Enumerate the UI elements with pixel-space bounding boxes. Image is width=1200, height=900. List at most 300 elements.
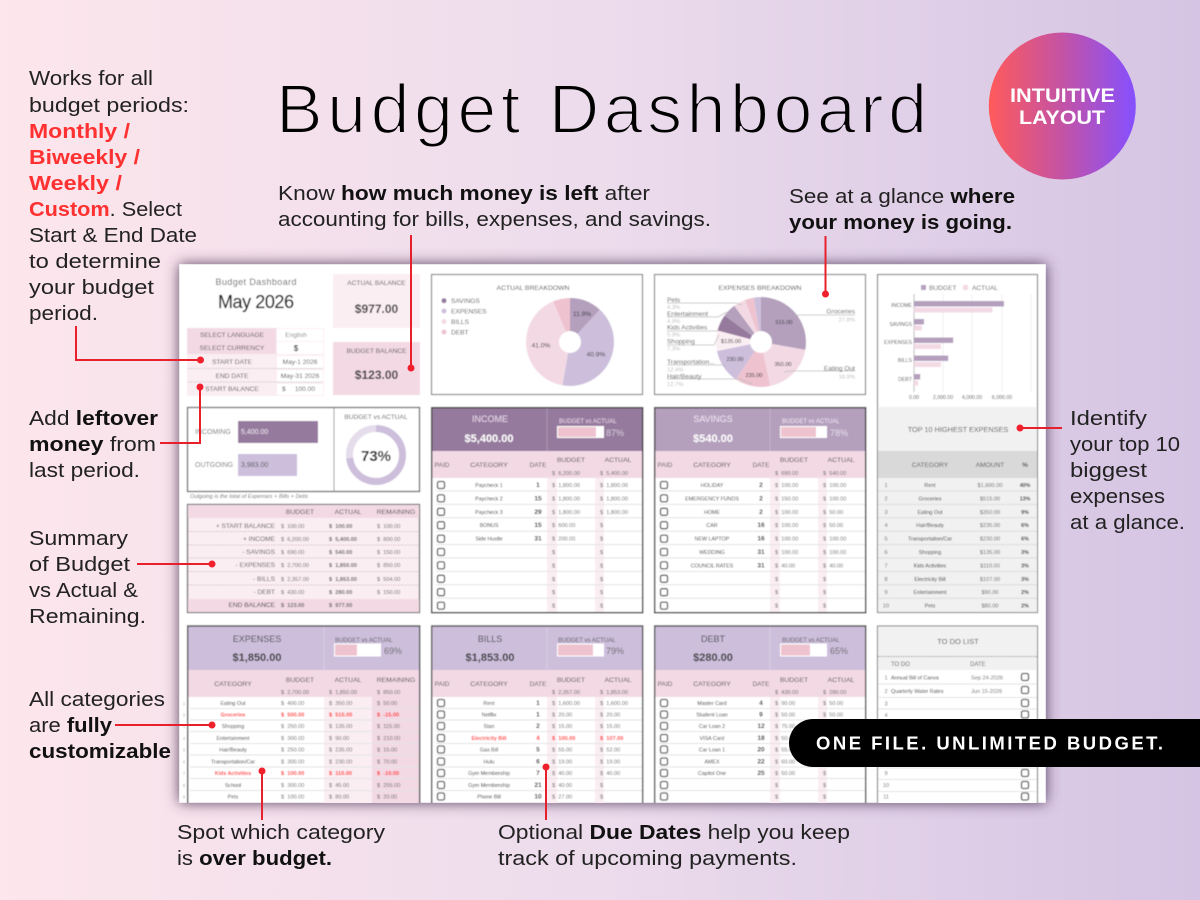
panel: expenses: 3 <box>183 724 186 729</box>
panel: savings: 31 <box>757 549 765 556</box>
panel: to do list: 10 <box>883 783 889 789</box>
callout: summary: Remaining. <box>29 606 146 628</box>
panel: income: 31 <box>534 536 542 543</box>
table: top 10 highest expenses: 1 <box>884 483 888 489</box>
panel: to do list: 11 <box>883 794 889 800</box>
panel: income: $ 1,800.00 <box>552 496 580 502</box>
panel: debt: 12 <box>757 723 765 730</box>
panel: bills: $ 20.00 <box>600 712 620 718</box>
panel: savings: HOLIDAY <box>701 483 724 489</box>
callout: budget periods: to determine <box>29 251 161 273</box>
banner: one file unlimited budget <box>789 719 1200 767</box>
table: top 10 highest expenses: Entertainment <box>914 590 947 596</box>
panel: debt: Master Card <box>697 701 727 707</box>
panel: savings: $ 690.00 <box>775 471 798 477</box>
panel: debt: $ <box>775 783 779 789</box>
panel: summary table: $ 690.00 <box>281 550 304 556</box>
panel: bills: Gym Membership <box>468 783 510 789</box>
panel: savings: DATE <box>752 462 770 469</box>
table: top 10 highest expenses: 6% <box>1021 523 1029 529</box>
panel: expenses: $ 230.00 <box>329 760 352 766</box>
panel: settings table: May-1 2026 <box>283 359 318 366</box>
panel: summary table: $ 100.00 <box>329 524 352 530</box>
panel: summary table: $ 1,853.00 <box>329 577 357 583</box>
panel: debt: $ 430.00 <box>775 690 798 696</box>
panel: income: 15 <box>534 522 542 529</box>
panel: settings table: START BALANCE <box>205 386 259 393</box>
panel: debt: $ 50.00 <box>775 771 795 777</box>
panel: savings: 78% <box>830 428 848 438</box>
callout: over budget: Spot which category <box>177 822 385 844</box>
chart: expenses breakdown pie: Pets <box>667 297 681 304</box>
table: top 10 highest expenses: $80.00 <box>981 604 999 610</box>
chart: actual breakdown pie: BILLS <box>451 319 470 326</box>
panel: savings: 2 <box>759 509 763 516</box>
panel: summary table: REMAINING <box>377 509 415 516</box>
panel: bills: 7 <box>536 770 540 777</box>
table: top 10 highest expenses: 6% <box>1021 537 1029 543</box>
panel: debt: $ 50.00 <box>775 712 795 718</box>
panel: savings <box>654 407 866 613</box>
callout: budget periods: period. <box>29 303 98 325</box>
callout: budget periods: Start & End Date <box>29 225 197 247</box>
panel: income: $ <box>600 577 604 583</box>
heading: dashboard name and month <box>216 277 296 312</box>
chart: budget vs actual bar chart: BILLS <box>898 358 913 364</box>
panel: bills: 21 <box>534 782 542 789</box>
panel: income: $5,400.00 <box>465 433 513 445</box>
panel: expenses: Eating Out <box>220 701 246 707</box>
panel: income: $ <box>552 590 556 596</box>
dashboard shadow <box>179 264 1046 803</box>
panel: settings table: START DATE <box>212 359 253 366</box>
panel: debt: Car Loan 1 <box>699 748 725 754</box>
panel: expenses: $ 15.00 <box>377 748 397 754</box>
panel: debt: $ 50.00 <box>823 701 843 707</box>
panel: bills: BUDGET <box>557 677 585 684</box>
panel: expenses: EXPENSES <box>233 634 281 644</box>
table: top 10 highest expenses: 3% <box>1021 550 1029 556</box>
callout: top 10 <box>1070 408 1185 534</box>
callout: how much money is left: accounting for bills, expenses, and savings. <box>278 209 711 231</box>
panel: expenses: REMAINING <box>377 677 415 684</box>
panel: expenses: $ 100.00 <box>281 771 304 777</box>
panel: expenses: $ 2,700.00 <box>281 690 309 696</box>
panel: debt: 4 <box>759 700 763 707</box>
table: top 10 highest expenses: 13% <box>1020 496 1031 502</box>
panel: to do list: Jun 15-2026 <box>971 689 1002 695</box>
chart: actual breakdown pie: DEBT <box>451 330 469 336</box>
badge: intuitive layout: LAYOUT <box>1019 107 1105 129</box>
table: top 10 highest expenses: Rent <box>924 483 936 489</box>
chart: expenses breakdown pie: 515.00 <box>775 320 793 326</box>
panel: debt: $ 60.00 <box>775 760 795 766</box>
panel: summary table: END BALANCE <box>228 602 276 609</box>
panel: savings: $ 540.00 <box>823 471 846 477</box>
panel: summary table: $ 100.00 <box>281 524 304 530</box>
table: top 10 highest expenses: 2 <box>884 496 888 502</box>
panel: savings: CATEGORY <box>693 462 731 469</box>
panel: bills: ACTUAL <box>605 677 632 684</box>
callout: top 10: Identify <box>1070 408 1147 430</box>
panel: bills: BILLS <box>478 634 502 644</box>
panel: actual balance: ACTUAL BALANCE <box>347 280 406 287</box>
note: outgoing: Outgoing is the total of Expenses + Bills + Debt. <box>190 494 309 500</box>
panel: summary table: $ 6,200.00 <box>281 537 309 543</box>
callout: budget periods: Works for all <box>29 68 153 90</box>
panel: debt: DATE <box>752 681 770 688</box>
title: Budget Dashboard <box>276 70 927 148</box>
panel: expenses <box>182 624 422 803</box>
panel: debt: 65% <box>830 646 848 656</box>
callout: over budget <box>177 822 385 870</box>
panel: bills: 2 <box>536 723 540 730</box>
table: top 10 highest expenses: Kids Activities <box>914 563 947 569</box>
panel: to do list: Sep 24-2026 <box>971 676 1003 682</box>
panel: income <box>431 407 643 613</box>
chart: expenses breakdown pie: Hair/Beauty <box>667 374 702 380</box>
panel: bills: $ <box>600 783 604 789</box>
panel: savings: HOME <box>704 510 720 516</box>
chart: actual breakdown pie: SAVINGS <box>451 298 480 305</box>
panel: debt: $ 280.00 <box>823 690 846 696</box>
panel: income: $ <box>552 563 556 569</box>
panel: income: BUDGET <box>557 457 585 464</box>
chart: expenses breakdown pie: $135.00 <box>721 339 741 345</box>
panel: debt: 20 <box>757 746 765 754</box>
callout: top 10: biggest <box>1070 460 1148 482</box>
panel: debt: ACTUAL <box>828 677 855 684</box>
banner: one file unlimited budget: ONE FILE. UNLIMITED BUDGET. <box>816 732 1163 754</box>
panel: expenses: 4 <box>183 736 186 741</box>
panel: expenses: $ 100.00 <box>281 794 304 800</box>
panel: to do list: 9 <box>884 771 888 777</box>
panel: to do list: TO DO <box>891 662 910 668</box>
panel: bills: $1,853.00 <box>466 652 514 664</box>
arrow: customizable categories <box>115 722 216 728</box>
panel: savings: 2 <box>759 495 763 502</box>
panel: income: 87% <box>606 428 624 438</box>
panel: debt: CATEGORY <box>693 681 731 688</box>
panel: expenses: 1 <box>183 701 186 706</box>
chart: expenses breakdown pie: 350.00 <box>774 362 792 368</box>
badge: intuitive layout <box>989 32 1136 180</box>
callout: budget periods: Custom . Select <box>29 199 182 221</box>
panel: savings: $ <box>823 590 827 596</box>
panel: debt: $ 90.00 <box>775 701 795 707</box>
panel: summary table: $ 100.00 <box>377 524 400 530</box>
panel: bills: $ 1,600.00 <box>552 701 580 707</box>
panel: bills: $ 20.00 <box>552 712 572 718</box>
table: top 10 highest expenses: % <box>1022 462 1028 469</box>
panel: bills: $ 107.00 <box>600 736 623 742</box>
callout: where your money is going: See at a glance where <box>789 186 1015 208</box>
chart: budget vs actual bar chart: 6,000.00 <box>992 395 1012 401</box>
panel: savings: $ 100.00 <box>823 483 846 489</box>
panel: income: $ <box>600 523 604 529</box>
arrow: start balance <box>160 384 204 443</box>
panel: incoming and outgoing <box>188 408 420 492</box>
panel: to do list: 3 <box>884 702 888 708</box>
panel: summary table: BUDGET <box>286 509 314 516</box>
panel: summary table: - BILLS <box>253 576 276 583</box>
panel: bills: $ 40.00 <box>600 771 620 777</box>
chart: expenses breakdown pie: Shopping <box>667 338 695 346</box>
chart: budget vs actual donut <box>344 414 408 482</box>
panel: savings: $ 50.00 <box>823 510 843 516</box>
panel: summary table: $ 280.00 <box>329 590 352 596</box>
panel: debt: $280.00 <box>693 652 733 664</box>
chart: actual breakdown pie: 41.0% <box>532 342 550 350</box>
table: top 10 highest expenses <box>878 407 1037 612</box>
panel: expenses: $1,850.00 <box>233 652 281 664</box>
badge: intuitive layout: INTUITIVE <box>1010 85 1115 107</box>
callout: budget periods <box>29 68 197 325</box>
table: top 10 highest expenses: $90.00 <box>981 590 999 596</box>
panel: bills: 10 <box>534 794 542 800</box>
callout: top 10: expenses <box>1070 486 1165 508</box>
panel: expenses: $ 300.00 <box>281 736 304 742</box>
table: top 10 highest expenses: $1,600.00 <box>978 483 1002 489</box>
panel: expenses: $ 235.00 <box>329 748 352 754</box>
panel: expenses: $ 80.00 <box>329 794 349 800</box>
panel: to do list: Quarterly Water Rates <box>891 689 944 695</box>
panel: debt: Car Loan 2 <box>699 724 725 730</box>
chart: expenses breakdown pie: Groceries <box>826 308 856 316</box>
panel: summary table: + START BALANCE <box>216 523 276 530</box>
callout: how much money is left: Know how much money is left after <box>278 183 650 205</box>
panel: debt: Capitol One <box>698 771 726 777</box>
arrow: money left <box>408 235 414 372</box>
chart: actual breakdown pie: EXPENSES <box>451 308 487 316</box>
chart: expenses breakdown pie: Kids Activities <box>667 324 708 332</box>
panel: expenses: Hair/Beauty <box>219 748 247 754</box>
panel: summary table: - EXPENSES <box>235 562 276 569</box>
table: top 10 highest expenses: 5 <box>884 537 888 543</box>
panel: debt: $ <box>823 794 827 800</box>
callout: customizable: All categories <box>29 689 165 711</box>
panel: income: Paycheck 1 <box>475 483 503 489</box>
callout: budget periods: your budget <box>29 277 155 299</box>
panel: savings: $ 100.00 <box>823 550 846 556</box>
table: top 10 highest expenses: CATEGORY <box>912 462 949 469</box>
panel: expenses: $ 255.00 <box>377 783 400 789</box>
panel: bills <box>431 626 643 826</box>
chart: actual breakdown pie <box>432 274 642 394</box>
panel: bills: CATEGORY <box>470 681 508 688</box>
table: top 10 highest expenses: Eating Out <box>917 510 943 516</box>
chart: budget vs actual bar chart: BUDGET <box>929 285 956 292</box>
table: top 10 highest expenses: 2% <box>1021 604 1029 610</box>
panel: savings: 2 <box>759 482 763 489</box>
panel: expenses: 9 <box>183 794 186 800</box>
panel: budget balance: $123.00 <box>355 368 399 382</box>
panel: expenses: $ 50.00 <box>377 701 397 707</box>
panel: income: $ <box>552 550 556 556</box>
panel: income: INCOME <box>472 414 508 424</box>
panel: bills: 1 <box>536 700 540 707</box>
panel: bills: $ 52.00 <box>600 748 620 754</box>
panel: debt <box>654 626 866 826</box>
table: top 10 highest expenses: 7 <box>884 563 888 569</box>
arrow: where money goes <box>822 236 829 298</box>
arrow: start date <box>76 326 204 364</box>
panel: expenses: 8 <box>183 783 186 788</box>
callout: where your money is going: your money is going. <box>789 212 1012 234</box>
panel: settings table: May-31 2026 <box>281 373 320 380</box>
panel: bills: $ <box>600 794 604 800</box>
chart: expenses breakdown pie: 230.00 <box>726 357 744 363</box>
chart: expenses breakdown pie: 12.7% <box>667 382 683 388</box>
table: top 10 highest expenses: $230.00 <box>980 537 1000 543</box>
panel: bills: $ 15.00 <box>552 724 572 730</box>
callout: budget periods: budget periods: <box>29 95 189 117</box>
panel: debt: 22 <box>757 758 765 766</box>
panel: income: $ 5,400.00 <box>600 471 628 477</box>
panel: expenses: $ 90.00 <box>329 736 349 742</box>
panel: savings: $ <box>823 577 827 583</box>
panel: savings: PAID <box>658 462 673 469</box>
panel: bills: Phone Bill <box>477 794 501 800</box>
panel: expenses: CATEGORY <box>214 681 252 688</box>
panel: expenses: $ 135.00 <box>329 724 352 730</box>
table: top 10 highest expenses: 9% <box>1021 510 1029 516</box>
callout: top 10: at a glance. <box>1070 512 1185 534</box>
panel: expenses: BUDGET <box>286 677 314 684</box>
table: top 10 highest expenses: $135.00 <box>980 550 1000 556</box>
panel: income: $ 1,800.00 <box>600 510 628 516</box>
panel: bills: 1 <box>536 712 540 718</box>
panel: bills: $ 40.00 <box>552 771 572 777</box>
panel: budget balance <box>333 342 420 395</box>
dashboard card <box>179 264 1046 826</box>
panel: summary table: $ 504.00 <box>377 577 400 583</box>
panel: income: $ <box>600 604 604 610</box>
panel: summary table: - SAVINGS <box>242 549 276 556</box>
panel: summary table: $ 150.00 <box>377 550 400 556</box>
panel: settings table: English <box>285 332 307 339</box>
panel: income: DATE <box>529 462 547 469</box>
chart: expenses breakdown pie: Entertainment <box>667 311 708 318</box>
panel: summary table: $ 2,357.00 <box>281 577 309 583</box>
panel: income: 1 <box>536 482 540 489</box>
panel: income: CATEGORY <box>470 462 508 469</box>
panel: bills: $ 55.00 <box>552 748 572 754</box>
panel: bills: 6 <box>536 758 540 766</box>
panel: debt: $ 50.00 <box>823 712 843 718</box>
table: top 10 highest expenses: $235.00 <box>980 523 1000 529</box>
panel: expenses: Pets <box>228 794 239 800</box>
panel: savings: $ <box>775 577 779 583</box>
panel: actual balance <box>333 274 420 328</box>
panel: summary table: $ 1,850.00 <box>329 563 357 569</box>
panel: incoming and outgoing: INCOMING <box>195 429 231 436</box>
panel: savings: $ 100.00 <box>775 537 798 543</box>
panel: debt: Student Loan <box>696 712 728 718</box>
panel: expenses: $ 1,850.00 <box>329 690 357 696</box>
panel: bills: $ 40.00 <box>552 783 572 789</box>
panel: bills: $ 19.00 <box>552 760 572 766</box>
panel: expenses: $ 515.00 <box>329 712 352 718</box>
panel: income: $ 6,200.00 <box>552 471 580 477</box>
callout: due dates: Optional Due Dates help you keep <box>498 822 850 844</box>
panel: expenses: $ -10.00 <box>377 771 399 777</box>
arrow: over budget <box>258 768 266 820</box>
chart: budget vs actual bar chart: INCOME <box>891 303 913 309</box>
panel: expenses: $ 45.00 <box>329 783 349 789</box>
panel: bills: Gym Membership <box>468 771 510 777</box>
table: top 10 highest expenses: Shopping <box>919 550 941 556</box>
panel: expenses: $ -15.00 <box>377 712 399 718</box>
panel: debt: 18 <box>757 735 765 742</box>
panel: debt: $ 75.00 <box>775 724 795 730</box>
table: top 10 highest expenses: 9 <box>884 590 888 596</box>
panel: income: $ <box>600 590 604 596</box>
chart: actual breakdown pie: 40.9% <box>587 352 605 358</box>
panel: bills: $ 1,600.00 <box>600 701 628 707</box>
panel: incoming and outgoing: 5,400.00 <box>241 429 268 436</box>
panel: bills: Stan <box>484 724 494 730</box>
panel: budget balance: BUDGET BALANCE <box>347 348 407 355</box>
panel: savings: NEW LAPTOP <box>695 537 730 543</box>
panel: income: $ 200.00 <box>552 537 575 543</box>
panel: bills: PAID <box>435 681 450 688</box>
panel: settings table: SELECT CURRENCY <box>200 345 265 352</box>
table: top 10 highest expenses: 3% <box>1021 577 1029 583</box>
panel: debt: PAID <box>658 681 673 688</box>
panel: income: 29 <box>534 509 542 516</box>
panel: expenses: $ 350.00 <box>329 701 352 707</box>
arrow: summary <box>137 560 216 568</box>
panel: savings: COUNCIL RATES <box>691 563 734 569</box>
panel: bills: $ 27.00 <box>552 794 572 800</box>
panel: bills: Rent <box>483 701 495 707</box>
chart: expenses breakdown pie: EXPENSES BREAKDOWN <box>718 285 802 292</box>
chart: expenses breakdown pie: 12.4% <box>667 368 683 374</box>
panel: debt: VISA Card <box>700 736 724 742</box>
panel: bills: BUDGET vs ACTUAL <box>558 638 616 644</box>
chart: budget vs actual bar chart: DEBT <box>898 377 913 383</box>
arrow: top 10 <box>1016 424 1062 432</box>
heading: dashboard name and month: Budget Dashboard <box>216 277 296 287</box>
chart: expenses breakdown pie: 18.9% <box>839 374 855 380</box>
panel: expenses: $ 250.00 <box>281 724 304 730</box>
panel: bills: $ 2,357.00 <box>552 690 580 696</box>
callout: leftover money: money from <box>29 434 156 456</box>
panel: expenses: $ 70.00 <box>377 760 397 766</box>
panel: income: Side Hustle <box>475 537 503 543</box>
panel: summary table: $ 540.00 <box>329 550 352 556</box>
panel: expenses: ACTUAL <box>335 677 362 684</box>
panel: expenses: $ 300.00 <box>281 760 304 766</box>
panel: savings: 31 <box>757 562 765 569</box>
table: top 10 highest expenses: 3 <box>884 510 888 516</box>
panel: debt: BUDGET <box>780 677 808 684</box>
table: top 10 highest expenses: 8 <box>884 577 888 583</box>
table: top 10 highest expenses: $107.00 <box>980 577 1000 583</box>
panel: summary table: $ 2,700.00 <box>281 563 309 569</box>
panel: to do list: DATE <box>970 662 986 668</box>
panel: settings table: $ <box>282 386 286 393</box>
panel: summary table: $ 150.00 <box>377 590 400 596</box>
panel: savings: $ 150.00 <box>775 496 798 502</box>
panel: debt: $ 50.00 <box>775 736 795 742</box>
panel: income: $ <box>600 550 604 556</box>
heading: dashboard name and month: May 2026 <box>218 292 294 312</box>
panel: expenses: Entertainment <box>217 736 250 742</box>
panel: income: $ 1,800.00 <box>600 483 628 489</box>
panel: summary table: ACTUAL <box>335 509 362 516</box>
